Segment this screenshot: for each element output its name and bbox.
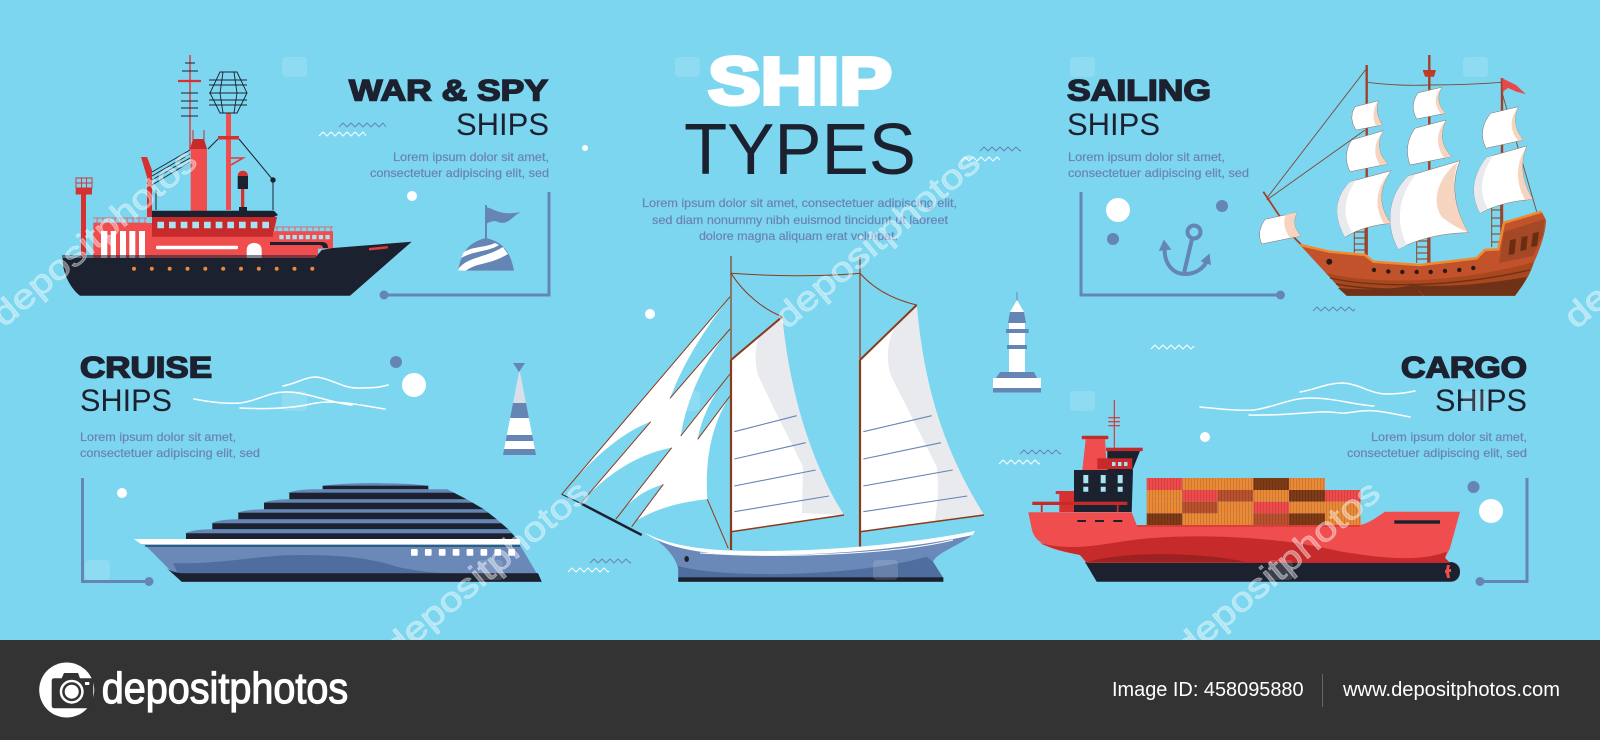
heading: war and spy ships: SHIPS: [456, 106, 549, 142]
cargo ship: [1028, 400, 1460, 582]
text: war and spy description: [370, 150, 549, 180]
hull: [63, 242, 412, 296]
central sailboat: [562, 256, 984, 582]
intro text: sed diam nonummy nibh euismod tincidunt ut laoreet: [652, 213, 949, 227]
galleon: [1259, 55, 1546, 296]
watermarks: depositphotos: [377, 473, 596, 666]
heading: cargo ships: CARGO: [1401, 352, 1527, 384]
mast and radar: [178, 55, 276, 211]
mast: [1108, 400, 1120, 448]
left lookout post: [76, 178, 92, 258]
hull portholes and marks: [132, 246, 388, 271]
hull: [145, 545, 542, 582]
funnel and crane: [141, 130, 207, 217]
text: sailing description: Lorem ipsum dolor sit amet,: [1068, 150, 1225, 164]
hull marks and propeller: [1077, 520, 1451, 578]
text: cargo description: [1347, 430, 1527, 460]
decorative dots: [117, 145, 1503, 523]
text: war and spy description: consectetuer adipiscing elit, sed: [370, 166, 549, 180]
text: cruise description: consectetuer adipiscing elit, sed: [80, 446, 260, 460]
main sail right: [860, 305, 984, 532]
watermark camera marks: [85, 57, 1488, 580]
text: cargo description: Lorem ipsum dolor sit amet,: [1371, 430, 1527, 444]
heading: sailing ships: [1067, 74, 1211, 142]
main sail left: [731, 317, 844, 532]
heading: cruise ships: SHIPS: [80, 382, 172, 418]
white deck strip: [134, 539, 520, 544]
intro text: dolore magna aliquam erat volutpat.: [699, 229, 898, 243]
icon: anchor: [1160, 226, 1210, 274]
heading: cargo ships: SHIPS: [1435, 382, 1527, 418]
bracket: sailing: [1081, 192, 1285, 300]
hull portholes: [1326, 259, 1476, 274]
text: war and spy description: Lorem ipsum dolor sit amet,: [393, 150, 549, 164]
jib sails: [562, 297, 730, 520]
ladders: [1354, 203, 1501, 263]
footer image id: Image ID: 458095880: [1112, 679, 1304, 701]
text: cargo description: consectetuer adipiscing elit, sed: [1347, 446, 1527, 460]
sails: [1259, 87, 1533, 249]
text: cruise description: Lorem ipsum dolor sit amet,: [80, 430, 236, 444]
footer website: www.depositphotos.com: [1342, 679, 1560, 701]
superstructure: [62, 211, 333, 258]
heading: cruise ships: CRUISE: [80, 352, 212, 384]
intro text: [642, 196, 957, 243]
lighthouse: [993, 292, 1041, 392]
text: sailing description: consectetuer adipiscing elit, sed: [1068, 166, 1249, 180]
heading: cargo ships: [1401, 352, 1527, 418]
heading: cruise ships: [80, 352, 212, 418]
jib stays and bowsprit: [562, 297, 730, 548]
rigging and masts: [1263, 55, 1537, 263]
crow's nest and flag: [1423, 70, 1526, 94]
footer bar: [0, 640, 1600, 740]
waves: cruise: [194, 377, 388, 409]
icon: flag buoy: [458, 205, 521, 271]
footer logo: depositphotos: [102, 664, 348, 713]
decorative squiggles: [319, 123, 1355, 572]
keel: [1085, 562, 1460, 582]
title: [684, 44, 916, 190]
title: TYPES: [684, 109, 916, 190]
footer logo: [39, 662, 348, 718]
watermarks: [0, 141, 1600, 666]
bridge superstructure: [1032, 436, 1143, 512]
heading: war and spy ships: WAR & SPY: [349, 74, 548, 108]
heading: sailing ships: SHIPS: [1067, 106, 1160, 142]
waves: cargo: [1200, 383, 1415, 417]
hull: [642, 531, 975, 582]
bracket: war and spy: [380, 192, 549, 300]
title: SHIP: [708, 44, 892, 119]
hull: [1300, 212, 1546, 296]
decks: [185, 483, 526, 540]
bracket: cruise: [82, 478, 154, 586]
buoy: striped: [503, 363, 536, 455]
watermarks: depositphotos: [1168, 473, 1387, 666]
text: cruise description: [80, 430, 260, 460]
hull: [1028, 512, 1460, 563]
cabin windows: [411, 549, 515, 556]
text: sailing description: [1068, 150, 1249, 180]
masts and rigging: [731, 256, 917, 550]
war ship: [62, 55, 412, 296]
heading: sailing ships: SAILING: [1067, 74, 1211, 108]
sail shading: [1284, 87, 1533, 249]
heading: war and spy ships: [349, 74, 549, 142]
bracket: cargo: [1476, 478, 1527, 586]
cruise ship: [134, 483, 542, 582]
watermarks: depositphotos: [768, 143, 987, 336]
footer divider: [1322, 674, 1323, 707]
containers: [1147, 478, 1361, 525]
intro text: Lorem ipsum dolor sit amet, consectetuer adipiscing elit,: [642, 196, 957, 210]
